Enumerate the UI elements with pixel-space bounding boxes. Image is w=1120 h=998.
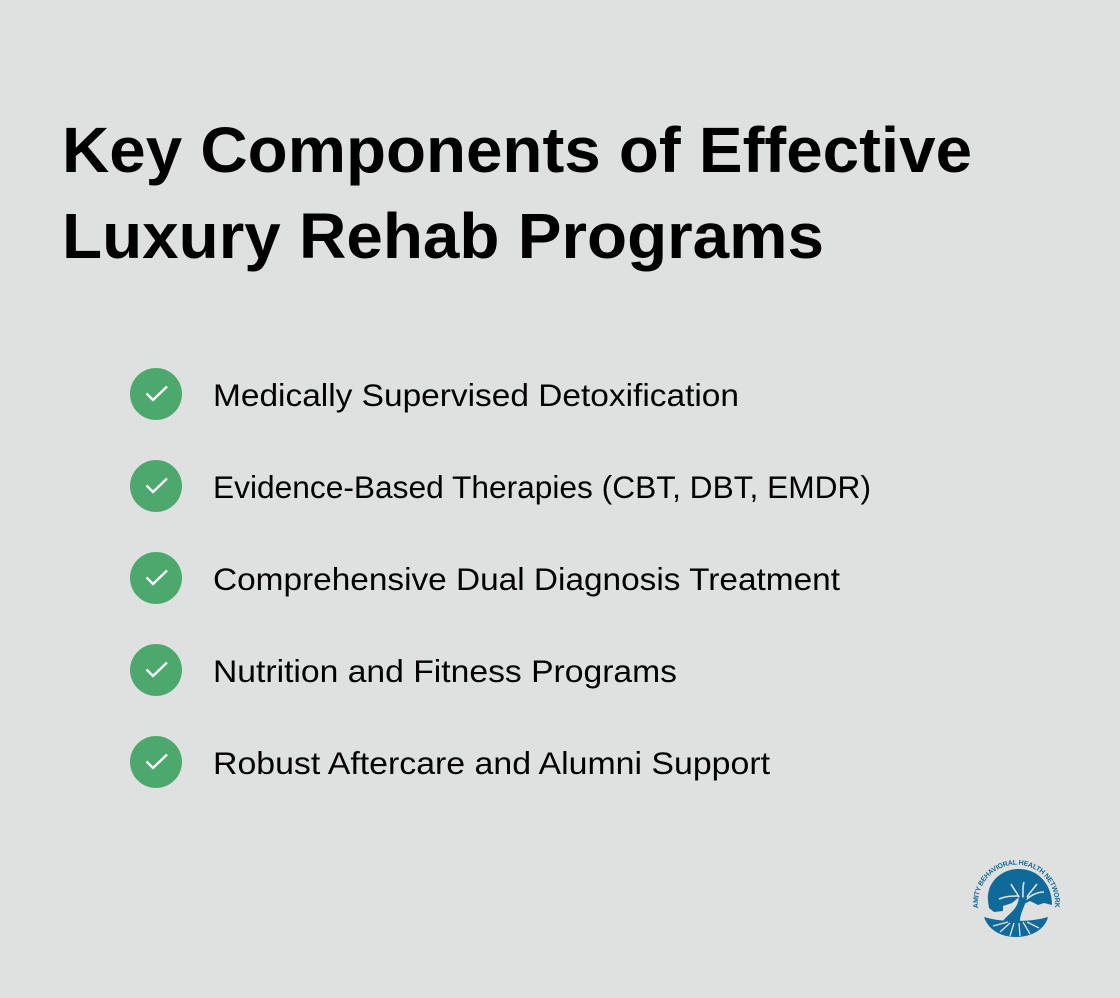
logo root bowl [984, 917, 1048, 937]
title [62, 114, 972, 272]
item: nutrition and fitness [130, 644, 677, 696]
item: evidence-based therapies: Evidence-Based Therapies (CBT, DBT, EMDR) [213, 469, 871, 505]
logo: Amity Behavioral Health Network tree [973, 860, 1060, 937]
item: nutrition and fitness: Nutrition and Fitness Programs [213, 653, 677, 689]
logo tree canopy [988, 869, 1052, 912]
checklist [130, 368, 871, 788]
item: evidence-based therapies [130, 460, 871, 512]
logo branches [999, 882, 1044, 904]
item: medically supervised detoxification: Medically Supervised Detoxification [213, 377, 739, 413]
item: aftercare and alumni support: Robust Aftercare and Alumni Support [213, 745, 770, 781]
item: medically supervised detoxification [130, 368, 739, 420]
logo trunk [1003, 897, 1027, 921]
title: Luxury Rehab Programs [62, 200, 824, 272]
item: dual diagnosis treatment: Comprehensive Dual Diagnosis Treatment [213, 561, 840, 597]
item: dual diagnosis treatment [130, 552, 840, 604]
logo roots [993, 922, 1039, 936]
item: aftercare and alumni support [130, 736, 770, 788]
logo wordmark: AMITY BEHAVIORAL HEALTH NETWORK [973, 860, 1060, 908]
title: Key Components of Effective [62, 114, 972, 186]
